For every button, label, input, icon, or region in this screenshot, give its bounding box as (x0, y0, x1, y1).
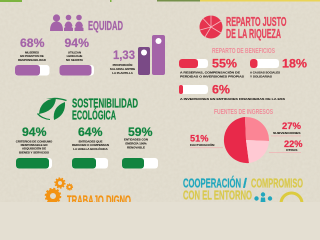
heading: reparto justo (226, 15, 287, 41)
stat: 64% footprint: ENTIDADES QUE (79, 140, 102, 144)
stat: 68% women: MUJERES (25, 50, 39, 54)
stat: 59% renewable energy: RENOVABLE (127, 146, 145, 150)
stat: 68% women: EN PUESTOS DE (20, 54, 44, 58)
panel: cooperacion y compromiso (183, 176, 303, 204)
stat: 68% women: RESPONSABILIDAD (18, 58, 46, 62)
panel: trabajo digno (46, 178, 131, 208)
label: 27% subvenciones: SUBVENCIONES (273, 131, 301, 135)
stat: 94% responsible consumption: 94% (22, 127, 46, 139)
stat: salary ratio 1,33 (110, 35, 165, 75)
stat: 68% women: 68% (20, 38, 44, 50)
label: 27% subvenciones: 27% (282, 121, 301, 131)
panel: equidad (15, 14, 165, 75)
heading: sostenibilidad ecologica (72, 96, 138, 122)
icon: three people (50, 14, 84, 31)
icon: leaves (37, 98, 67, 120)
label: 22% otras: OTRAS (286, 148, 298, 152)
stat: salary ratio 1,33: 1,33 (113, 50, 135, 62)
top colour strip (0, 0, 320, 2)
label: 22% otras: 22% (284, 139, 302, 149)
stat: 64% footprint: REDUCEN O COMPENSAN (72, 143, 109, 147)
stat: 6% financial entities: A INVERSIONES EN ENTIDADES FINANCIERAS DE LA ESS (180, 97, 285, 101)
stat: 64% footprint (72, 127, 109, 168)
stat: 59% renewable energy (122, 127, 158, 168)
stat: 59% renewable energy: ENTIDADES CON (124, 138, 148, 142)
stat: 94% language: NO SEXISTA (66, 58, 84, 62)
stat: 18% social causes (250, 58, 307, 78)
heading: cooperacion / compromiso con el entorno: COOPERACIÓN (183, 176, 241, 190)
heading: cooperacion / compromiso con el entorno (183, 176, 303, 202)
stat: 6% financial entities (179, 84, 285, 101)
stat: 64% footprint: 64% (78, 127, 102, 139)
heading: cooperacion / compromiso con el entorno: / (243, 176, 248, 190)
icon: gears (46, 178, 73, 203)
stat: 55% reserves: A RESERVAS, COMPENSACIÓN DE (180, 70, 240, 74)
icon: citrus slice circle (200, 16, 222, 38)
label: 27% subvenciones (271, 121, 301, 136)
stat: 94% language (60, 38, 94, 76)
heading: sostenibilidad ecologica: ECOLÓGICA (72, 108, 116, 122)
stat: 94% language: 94% (64, 38, 89, 50)
stat: 94% responsible consumption: ADQUISICIÓN DE (22, 146, 46, 150)
stat: 94% responsible consumption: BIENES Y SERVICIOS (19, 150, 49, 154)
panel: sostenibilidad ecologica (16, 96, 158, 168)
stat: salary ratio 1,33: LA PLANTILLA (112, 71, 134, 75)
label: 22% otras (269, 139, 302, 153)
label: 51% facturacion: 51% (190, 134, 208, 144)
subheading: fuentes de ingresos: FUENTES DE INGRESOS (214, 109, 273, 116)
stat: salary ratio 1,33: SALARIAL ENTRE (110, 67, 135, 71)
stat: 55% reserves (179, 58, 244, 78)
stat: 94% responsible consumption: CRITERIOS DE CONSUMO (16, 140, 53, 144)
heading: equidad: EQUIDAD (88, 19, 123, 33)
panel: reparto justo de la riqueza (179, 15, 307, 163)
stat: 68% women (15, 38, 50, 76)
stat: 6% financial entities: 6% (212, 84, 230, 96)
stat: salary ratio 1,33: PROPORCIÓN (113, 62, 132, 67)
stat: 94% language: LENGUAJE (67, 54, 82, 58)
icon: circular arrow (281, 193, 302, 204)
pie chart: income sources (224, 117, 269, 163)
stat: 18% social causes: 18% (282, 58, 307, 70)
stat: 59% renewable energy: ENERGÍA 100% (125, 140, 147, 146)
stat: 59% renewable energy: 59% (128, 127, 152, 139)
icon: people (254, 192, 272, 202)
subheading: reparto de beneficios: REPARTO DE BENEFICIOS (212, 48, 275, 55)
stat: 18% social causes: A CAUSAS SOCIALES (250, 70, 280, 74)
heading: reparto justo: DE LA RIQUEZA (226, 27, 281, 41)
stat: 55% reserves: 55% (212, 58, 237, 70)
stat: 94% responsible consumption: RESPONSABLE EN (21, 143, 47, 147)
label: 51% facturacion: FACTURACIÓN (190, 142, 214, 147)
stat: 94% language: UTILIZAN (68, 50, 81, 54)
stat: 55% reserves: PERDIDAS O INVERSIONES PROPIAS (180, 74, 244, 78)
heading: sostenibilidad ecologica: SOSTENIBILIDAD (72, 96, 138, 110)
stat: 64% footprint: LA HUELLA ECOLÓGICA (73, 146, 109, 151)
stat: 18% social causes: Y SOLIDARIAS (250, 74, 272, 78)
stat: 94% responsible consumption (16, 127, 53, 168)
label: 51% facturacion (190, 134, 223, 148)
